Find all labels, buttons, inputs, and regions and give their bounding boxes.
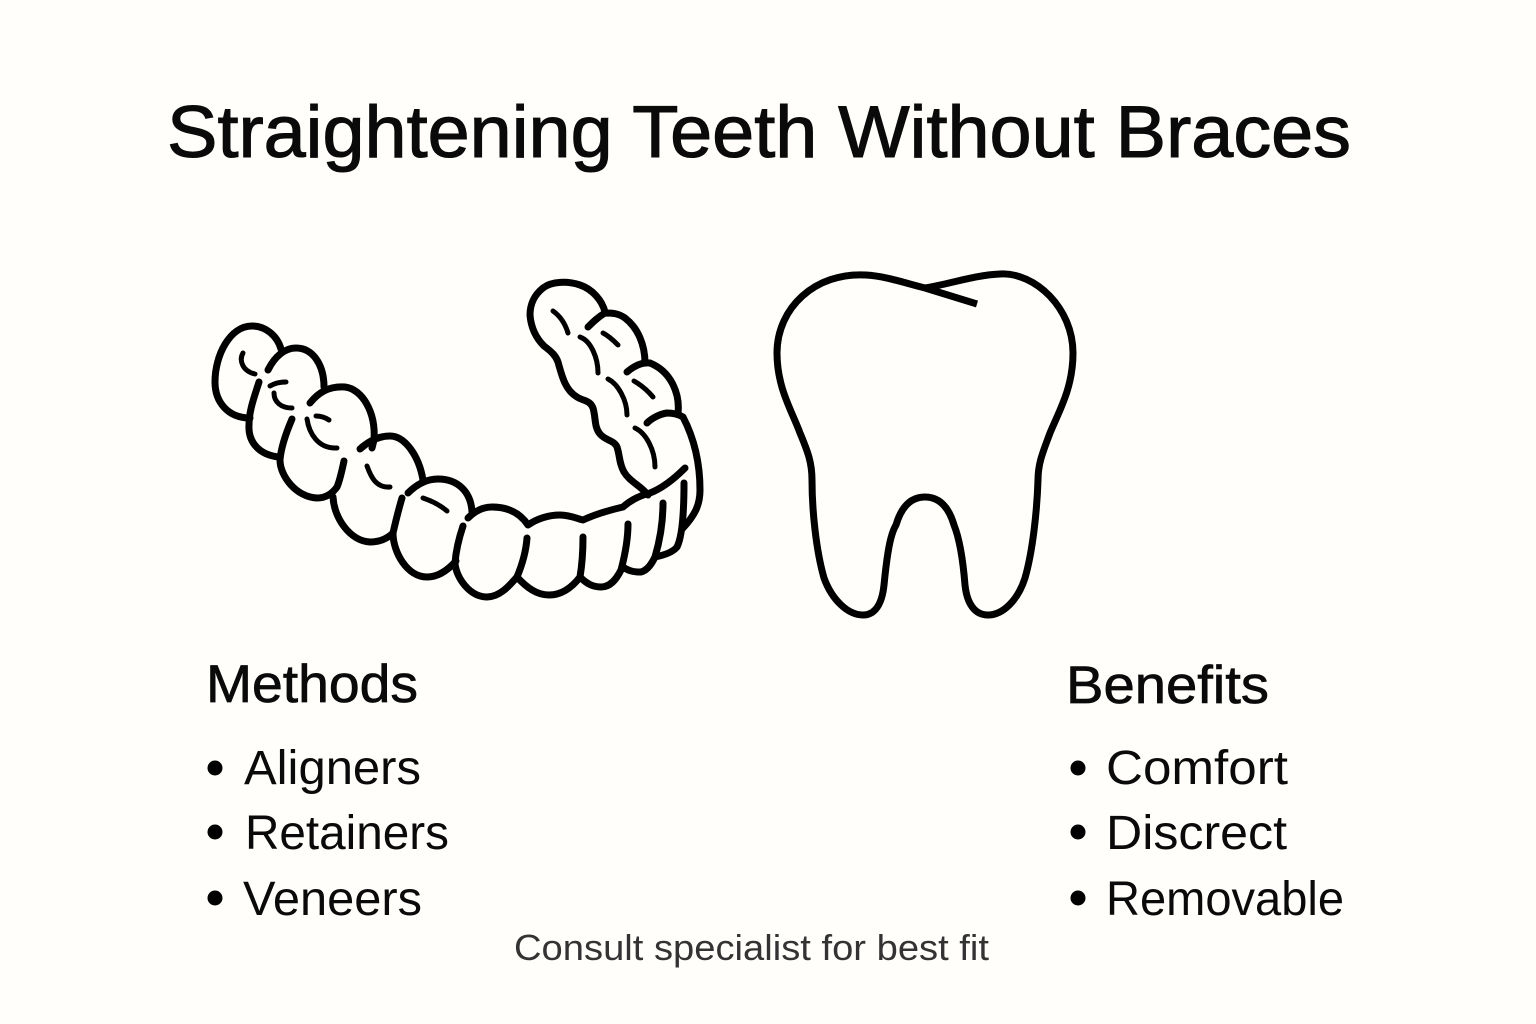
list: benefits items: Comfort: [1106, 742, 1288, 795]
list: methods items: Retainers: [245, 807, 449, 860]
list: methods items: Veneers: [243, 873, 422, 926]
list: benefits items: Discrect: [1106, 807, 1287, 860]
panel: methods: [206, 655, 449, 926]
list: benefits items: Removable: [1106, 873, 1344, 926]
list: methods items: Aligners: [244, 742, 421, 795]
list: methods items: [208, 742, 449, 926]
panel: benefits: [1066, 656, 1344, 926]
heading: methods: Methods: [206, 655, 418, 714]
footer note: Consult specialist for best fit: [514, 927, 989, 968]
tooth detail strokes: [241, 311, 655, 511]
list: benefits items: [1070, 742, 1344, 926]
heading: benefits: Benefits: [1066, 656, 1269, 715]
icon: clear aligner tray: [215, 282, 700, 597]
title: Straightening Teeth Without Braces: [167, 92, 1351, 173]
icon: molar tooth: [777, 274, 1073, 615]
